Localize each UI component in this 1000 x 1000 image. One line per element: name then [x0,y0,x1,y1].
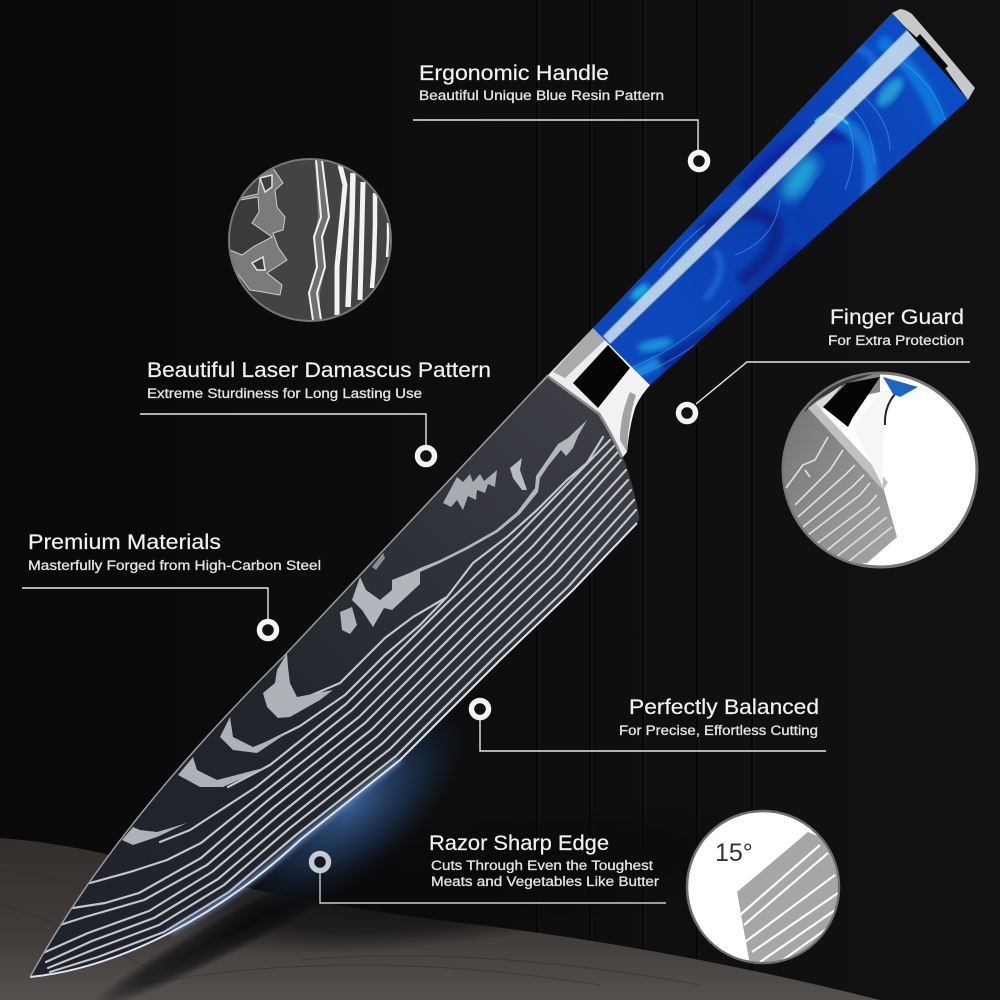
angle label: 15° [715,839,753,867]
damascus ridge [352,420,587,627]
callout: razor sharp edge [312,832,666,903]
edge highlight [170,760,400,932]
callout: premium materials: Premium Materials [28,531,221,554]
callout: razor sharp edge: Meats and Vegetables Like Butter [431,874,660,889]
steel end cap [892,9,975,100]
callout: finger guard: Finger Guard [830,306,964,329]
callout: laser damascus pattern: Extreme Sturdiness for Long Lasting Use [147,386,422,401]
callout: perfectly balanced [472,696,826,751]
callout: ergonomic handle: Beautiful Unique Blue Resin Pattern [419,88,664,103]
callout: premium materials [22,531,321,638]
callout: razor sharp edge: Razor Sharp Edge [429,832,609,855]
heel bevel [548,375,623,457]
blue resin handle [593,13,968,385]
bolster [548,328,650,457]
callout: perfectly balanced: Perfectly Balanced [629,696,819,719]
blue glow under the blade edge [202,665,502,947]
detail circle: finger guard [780,372,977,570]
callout: premium materials: Masterfully Forged from High-Carbon Steel [28,558,321,573]
callout: ergonomic handle [413,62,708,170]
callout: razor sharp edge: Cuts Through Even the Toughest [431,858,653,873]
detail circle: 15 degree edge [687,811,850,965]
blade with damascus pattern [30,375,639,977]
callout: finger guard [678,306,970,422]
callout: laser damascus pattern [140,359,491,464]
callout: perfectly balanced: For Precise, Effortless Cutting [619,723,818,738]
callout: laser damascus pattern: Beautiful Laser Damascus Pattern [147,359,491,382]
callout: ergonomic handle: Ergonomic Handle [419,62,609,85]
callout: finger guard: For Extra Protection [828,333,964,348]
damascus blobs [263,653,333,718]
detail circle: damascus pattern [225,159,391,321]
table surface [0,777,880,1000]
